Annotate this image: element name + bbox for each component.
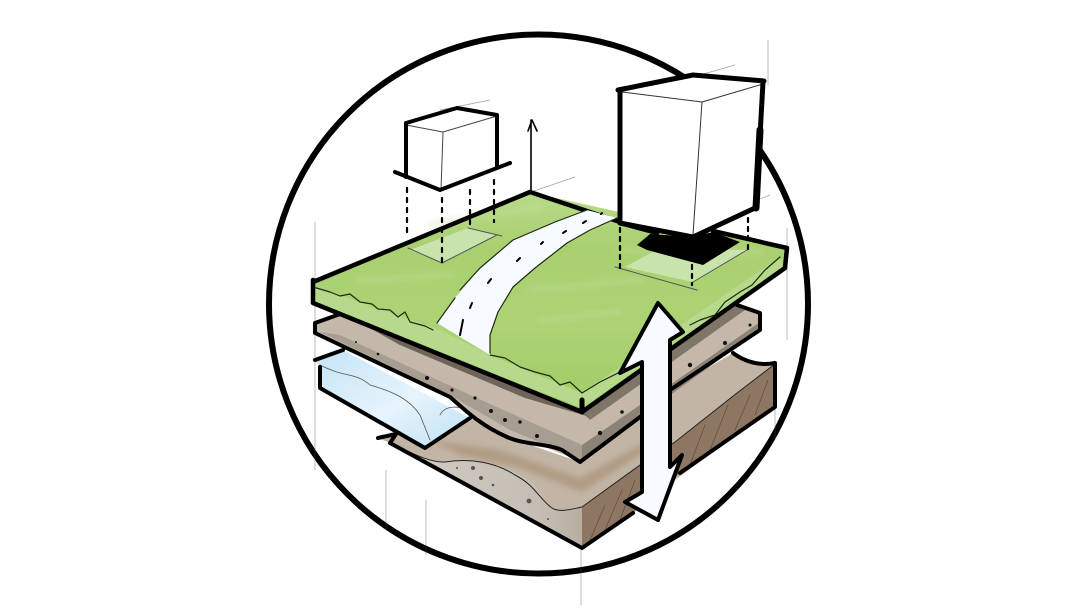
water ripple lines — [320, 365, 470, 440]
shadow of tall box — [637, 232, 740, 265]
box outline — [618, 75, 764, 237]
road centre dashes — [460, 213, 602, 335]
speckled side — [320, 332, 582, 460]
soil outline — [315, 305, 760, 462]
pale subsoil — [390, 443, 582, 548]
grass outline fringe — [313, 257, 780, 393]
speckles — [355, 324, 752, 438]
road — [437, 210, 617, 355]
road surface — [437, 210, 617, 355]
soil contour line — [392, 364, 775, 510]
water body — [315, 350, 470, 448]
bottom ground layer — [378, 353, 775, 548]
small box dashed guides — [407, 180, 494, 263]
grass surface — [313, 192, 787, 412]
soil body — [315, 305, 760, 462]
height arrow — [528, 120, 537, 192]
box outline — [395, 108, 510, 190]
soil edge outline — [378, 353, 775, 548]
water layer — [315, 350, 470, 448]
circle frame — [269, 34, 808, 574]
light brush strokes — [360, 207, 760, 320]
soil body — [378, 353, 775, 548]
soil hatch marks — [590, 380, 768, 540]
left footprint — [410, 228, 497, 263]
plate outline — [313, 192, 787, 412]
double-headed arrow — [620, 303, 683, 520]
brown hatched side — [582, 364, 775, 548]
green site plate — [313, 192, 787, 412]
road edge — [437, 210, 617, 353]
right footprint — [625, 248, 747, 282]
box body — [620, 75, 763, 237]
middle soil layer — [315, 305, 760, 462]
small box — [395, 108, 510, 190]
tan shading band — [430, 428, 670, 492]
box body — [406, 108, 497, 190]
dark hatch shading — [343, 313, 590, 417]
water outline — [315, 350, 470, 448]
tall box dashed guides — [620, 218, 748, 285]
box inner edges — [406, 116, 497, 190]
grass lower strip — [313, 257, 783, 408]
pebbles — [456, 466, 549, 520]
tall box — [618, 75, 764, 237]
construction lines — [315, 40, 787, 605]
box inner edges — [622, 84, 763, 235]
